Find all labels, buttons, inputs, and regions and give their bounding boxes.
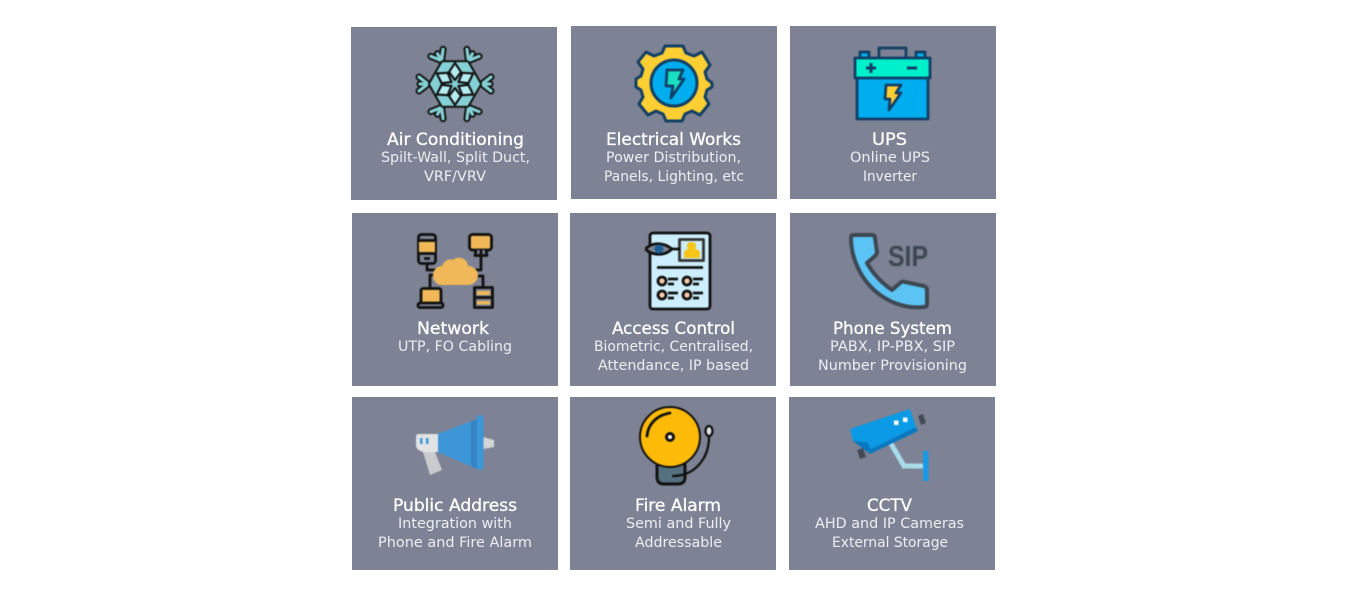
heading: CCTV [867,496,912,516]
description line 2: Phone and Fire Alarm [378,535,532,551]
icon: snowflake [419,49,491,119]
description line 2: Inverter [863,169,917,185]
panel: Access Control [570,213,776,386]
panel: CCTV [789,397,995,570]
description line 2: Number Provisioning [818,358,967,374]
icon: biometric document [646,233,710,309]
description line 2: VRF/VRV [424,169,486,185]
description line 1: Biometric, Centralised, [594,339,753,355]
heading: Public Address [393,496,517,516]
panel: Phone System [790,213,996,386]
panel: Fire Alarm [570,397,776,570]
description line 2: External Storage [832,535,948,551]
heading: Access Control [612,319,735,339]
heading: Electrical Works [606,130,741,150]
panel: Air Conditioning [351,27,557,200]
icon: bell [640,407,712,484]
icon: SIP phone: SIP [888,241,928,273]
icon: network cloud [418,234,492,308]
heading: Air Conditioning [387,130,524,150]
description line: UTP, FO Cabling [398,339,512,355]
icon: megaphone [416,415,494,475]
description line 1: AHD and IP Cameras [815,516,964,532]
icon: SIP phone [851,235,928,307]
description line 1: Spilt-Wall, Split Duct, [381,150,530,166]
panel: Electrical Works [571,26,777,199]
panel: Public Address [352,397,558,570]
panel: UPS [790,26,996,199]
heading: Fire Alarm [635,496,721,516]
description line 2: Panels, Lighting, etc [604,169,744,185]
icon: battery [855,48,930,119]
description line 1: PABX, IP-PBX, SIP [830,339,955,355]
description line 1: Integration with [398,516,512,532]
description line 2: Addressable [635,535,722,551]
icon: security camera [850,409,928,481]
heading: Phone System [833,319,952,339]
description line 1: Power Distribution, [606,150,741,166]
icon: gear with bolt [636,46,712,121]
panel: Network [352,213,558,386]
description line 1: Online UPS [850,150,930,166]
description line 1: Semi and Fully [626,516,731,532]
heading: UPS [872,130,907,150]
heading: Network [417,319,489,339]
description line 2: Attendance, IP based [598,358,749,374]
